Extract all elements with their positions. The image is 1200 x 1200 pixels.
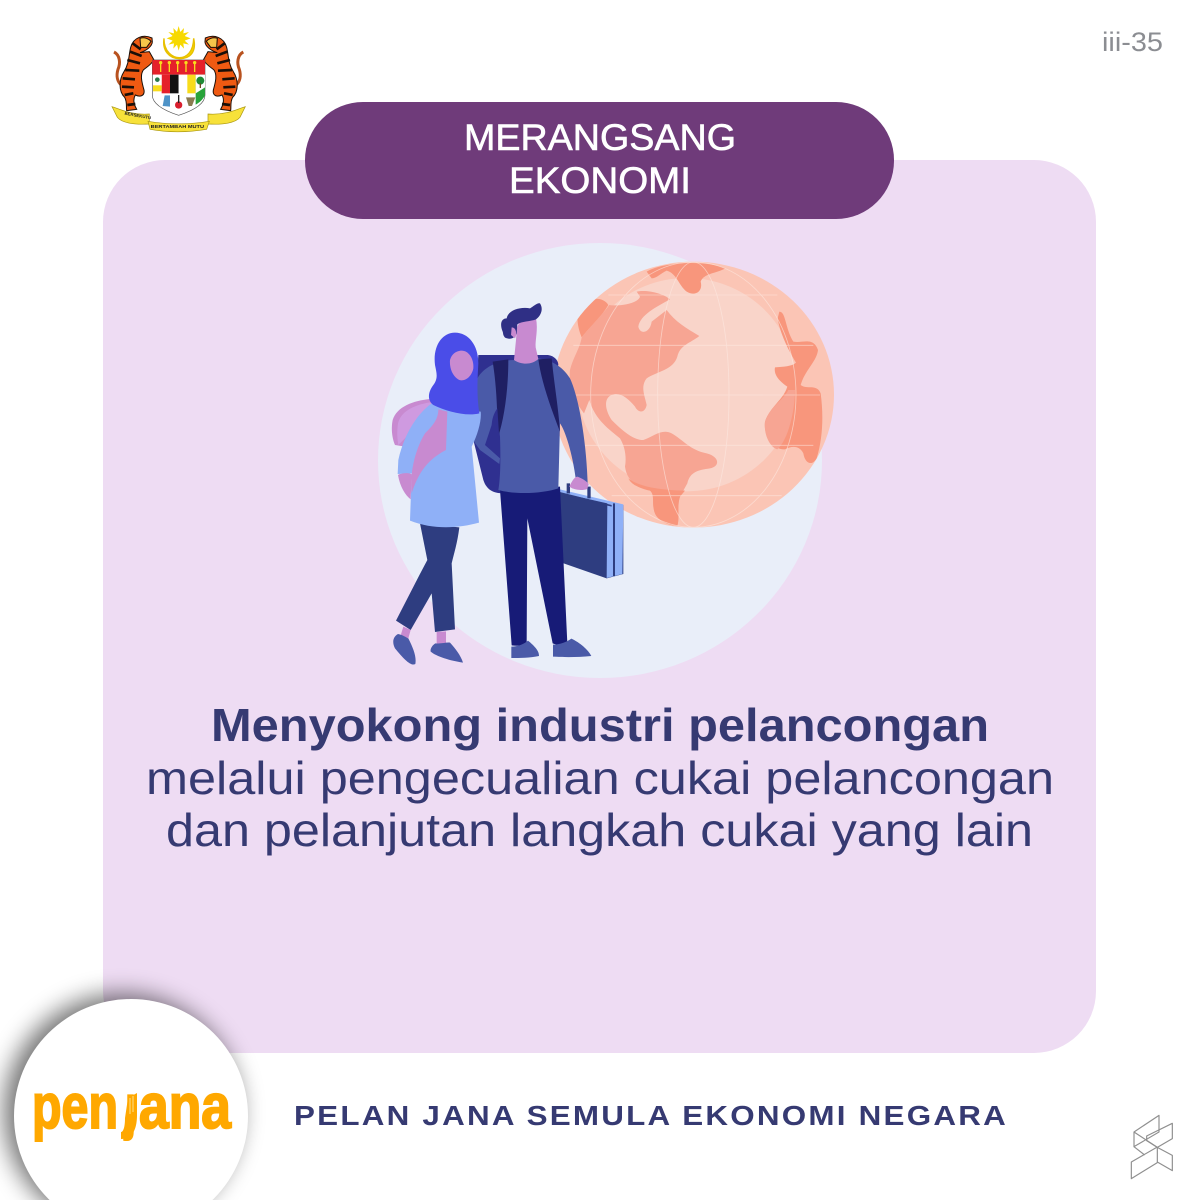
panel: main lilac card xyxy=(103,160,1096,1053)
logo: penjana wordmark: ana xyxy=(139,1072,232,1142)
header pill xyxy=(305,102,894,219)
body line two: dan pelanjutan langkah cukai yang lain xyxy=(166,804,1033,856)
body line one: melalui pengecualian cukai pelancongan xyxy=(146,752,1054,804)
man's torso and arms xyxy=(473,358,588,493)
woman's dress xyxy=(398,403,481,527)
icon: motto ribbon: BERSEKUTU xyxy=(124,111,152,120)
icon: right tiger xyxy=(203,36,243,111)
illustration: travellers xyxy=(392,303,623,664)
icon: crescent and star xyxy=(164,26,194,59)
woman's hijab xyxy=(429,333,479,414)
icon: corner logo mark xyxy=(1131,1115,1172,1179)
penjana badge xyxy=(4,994,248,1200)
icon: keris row xyxy=(159,61,196,72)
icon: Malaysian coat of arms xyxy=(112,26,245,132)
woman's legs xyxy=(396,523,459,632)
illustration: globe xyxy=(553,262,834,528)
icon: shield xyxy=(152,60,205,115)
icon: motto ribbon xyxy=(112,107,245,132)
illustration backdrop circle xyxy=(378,243,822,678)
logo: penjana wordmark: j xyxy=(123,1072,137,1142)
heading: Merangsang Ekonomi: EKONOMI xyxy=(509,160,691,201)
text block: main message xyxy=(146,699,1054,856)
graticule xyxy=(568,262,820,527)
logo: penjana wordmark: pen xyxy=(32,1072,118,1142)
continent shapes xyxy=(647,263,725,294)
man's shoes xyxy=(511,639,591,658)
footer tagline: PELAN JANA SEMULA EKONOMI NEGARA xyxy=(294,1100,1008,1131)
icon: motto ribbon: BERTAMBAH MUTU xyxy=(151,124,204,130)
woman's face xyxy=(450,351,473,380)
man's backpack xyxy=(473,355,558,493)
backpack straps xyxy=(493,358,560,438)
briefcase xyxy=(535,483,623,578)
woman's pink backpack xyxy=(392,399,447,453)
man's legs xyxy=(500,487,567,646)
highlight xyxy=(577,278,796,491)
man's hand xyxy=(569,477,589,490)
icon: left tiger xyxy=(114,36,154,111)
logo: penjana wordmark xyxy=(34,1092,232,1142)
man's hair xyxy=(501,303,542,339)
heading: Merangsang Ekonomi: MERANGSANG xyxy=(464,117,736,158)
headline: Menyokong industri pelancongan xyxy=(211,699,989,751)
woman's strap and sleeve xyxy=(411,409,447,493)
page number: iii-35 xyxy=(1102,27,1163,57)
woman's shoes xyxy=(393,634,463,664)
man's head and neck xyxy=(514,317,538,364)
